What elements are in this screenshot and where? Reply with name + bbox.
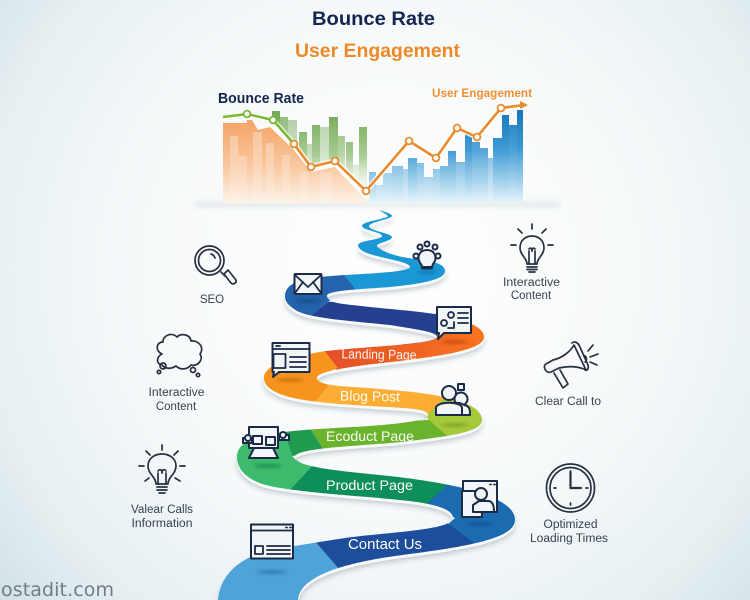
line: bounce rate green xyxy=(223,114,294,144)
icon: profile window xyxy=(462,481,497,526)
item: Clear Call to xyxy=(535,342,601,408)
item: Interactive Content right xyxy=(503,224,560,302)
road label: Landing Page: Landing Page xyxy=(341,346,417,363)
icon: browser window with bubble xyxy=(272,343,310,382)
icon: flow card xyxy=(437,307,471,344)
orange bars xyxy=(223,120,366,203)
item: Optimized Loading Times: Loading Times xyxy=(530,533,608,545)
road colour segments xyxy=(210,205,525,600)
label: SEO: SEO xyxy=(200,294,224,306)
icon: idea bulb on road xyxy=(414,242,440,274)
road label: Product Page: Product Page xyxy=(326,477,413,493)
chart label: User Engagement: User Engagement xyxy=(432,86,532,100)
icon: light bulb left xyxy=(139,445,185,493)
item: Optimized Loading Times xyxy=(530,464,608,545)
icon: connected devices xyxy=(243,427,289,468)
winding road xyxy=(210,205,525,600)
chart label: Bounce Rate: Bounce Rate xyxy=(218,91,304,107)
icon: thought cloud xyxy=(157,335,202,377)
icon: clock xyxy=(546,464,594,512)
road label: Ecoduct Page: Ecoduct Page xyxy=(326,428,414,444)
item: Interactive Content right: Content xyxy=(511,290,552,302)
chart baseline shadow xyxy=(195,203,560,206)
item: SEO xyxy=(195,246,236,306)
label: Optimized Loading Times: Optimized xyxy=(544,519,598,531)
line markers xyxy=(244,105,504,194)
label: Interactive Content: Interactive xyxy=(503,277,560,289)
icon: megaphone xyxy=(544,342,598,388)
item: Valear Calls Information xyxy=(131,445,193,530)
label: Interactive Content: Interactive xyxy=(148,387,204,399)
label: Clear Call to: Clear Call to xyxy=(535,396,601,408)
chart: bounce rate versus user engagement xyxy=(195,86,560,206)
blue bars xyxy=(369,110,523,203)
item: Interactive Content left: Content xyxy=(156,401,197,413)
road label: Contact Us: Contact Us xyxy=(348,536,422,553)
item: Interactive Content left xyxy=(148,335,204,413)
subtitle: User Engagement: User Engagement xyxy=(295,41,461,62)
green bars xyxy=(272,111,367,192)
label: Valear Calls Information: Valear Calls xyxy=(131,504,193,516)
road label: Blog Post: Blog Post xyxy=(340,387,400,405)
item: Valear Calls Information: Information xyxy=(132,518,192,530)
icon: people xyxy=(436,384,470,426)
title: Bounce Rate: Bounce Rate xyxy=(312,9,435,30)
icon: envelope xyxy=(294,274,322,302)
icon: magnifier xyxy=(195,246,236,284)
icon: content window xyxy=(251,524,293,574)
line: user engagement orange xyxy=(294,101,528,191)
icon: light bulb right xyxy=(511,224,553,272)
road shadow and edge xyxy=(218,212,515,600)
